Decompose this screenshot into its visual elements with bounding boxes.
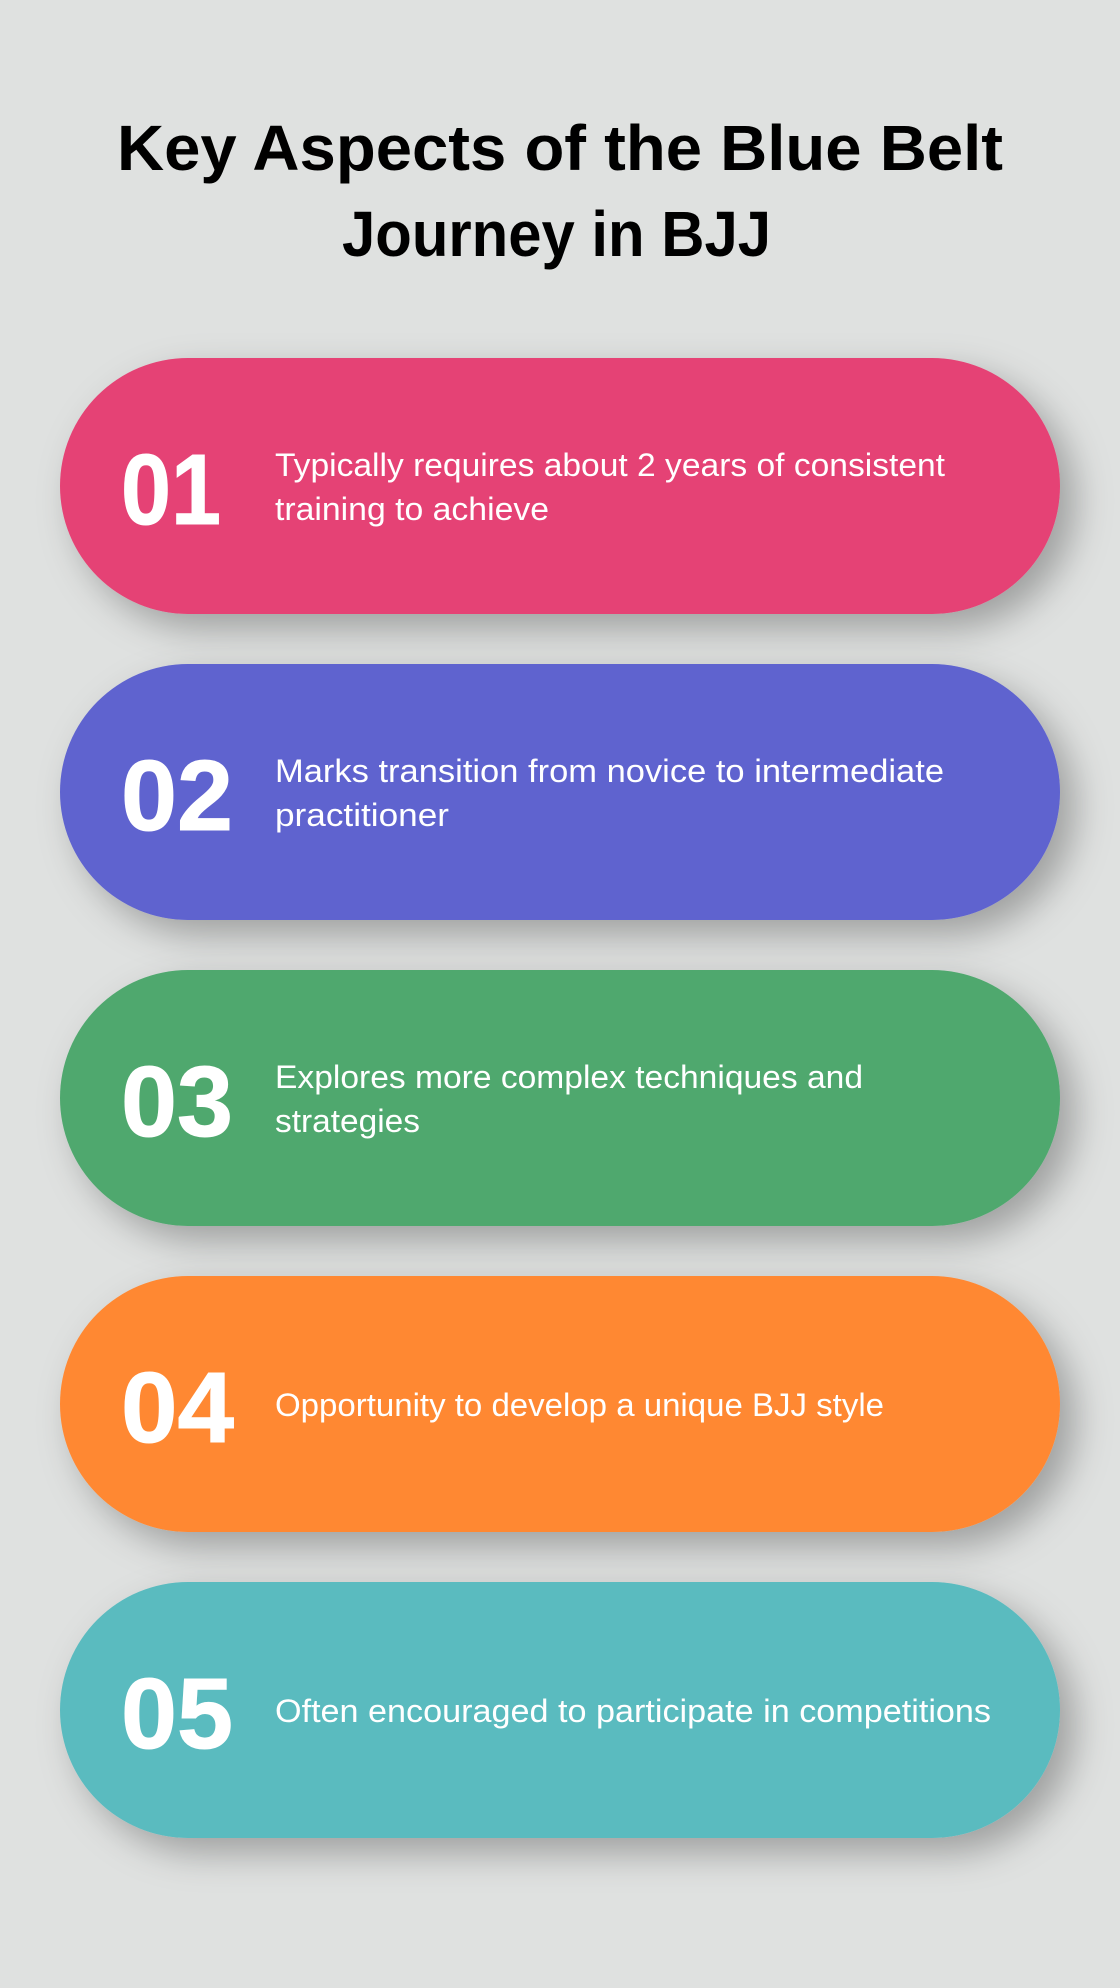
number 02: 02 [121, 740, 233, 852]
description 02: practitioner [275, 797, 449, 833]
pill background 03 [60, 970, 1060, 1226]
number 05: 05 [121, 1658, 233, 1770]
pill background 01 [60, 358, 1060, 614]
description 01: training to achieve [275, 491, 549, 527]
number 04: 04 [121, 1352, 234, 1464]
description 01 [275, 447, 945, 527]
pill background 05 [60, 1582, 1060, 1838]
title [117, 112, 1003, 270]
description 04: Opportunity to develop a unique BJJ style [275, 1387, 884, 1423]
description 01: Typically requires about 2 years of consistent [275, 447, 945, 483]
description 05: Often encouraged to participate in competitions [275, 1693, 991, 1729]
title: Journey in BJJ [342, 198, 771, 270]
pill background 04 [60, 1276, 1060, 1532]
description 03: strategies [275, 1103, 420, 1139]
title: Key Aspects of the Blue Belt [117, 112, 1003, 184]
number 01: 01 [121, 434, 221, 546]
panel: item 01 [60, 358, 1060, 614]
panel: item 02 [60, 664, 1060, 920]
description 02 [275, 753, 944, 833]
description 03 [275, 1059, 863, 1139]
number 03: 03 [121, 1046, 233, 1158]
pill background 02 [60, 664, 1060, 920]
panel: item 03 [60, 970, 1060, 1226]
panel: item 04 [60, 1276, 1060, 1532]
description 03: Explores more complex techniques and [275, 1059, 863, 1095]
description 02: Marks transition from novice to intermediate [275, 753, 944, 789]
panel: item 05 [60, 1582, 1060, 1838]
